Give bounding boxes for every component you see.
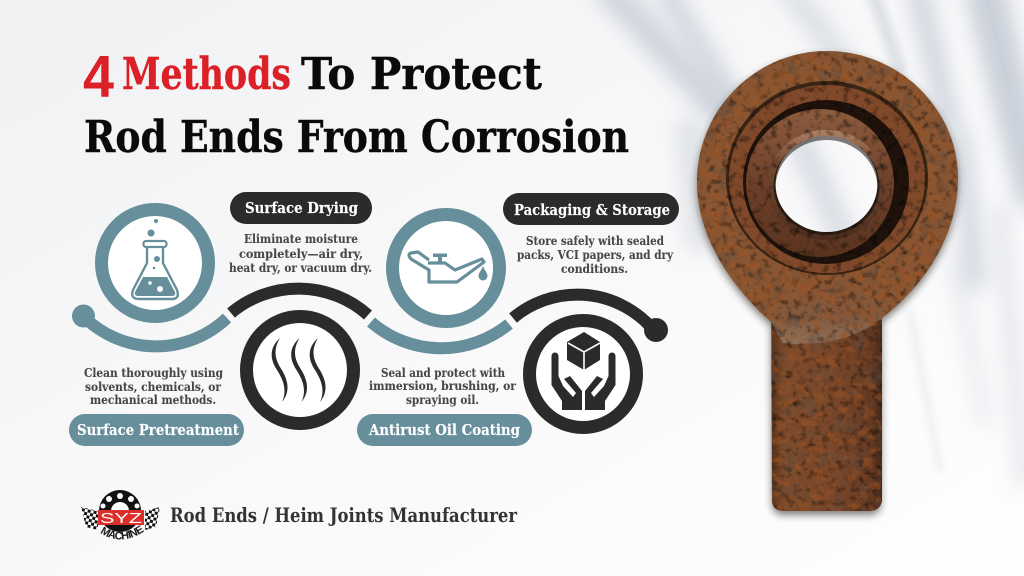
text: Surface Drying description: heat dry, or vacuum dry. — [229, 261, 372, 275]
label: Packaging & Storage — [503, 193, 679, 225]
dark connector arc — [231, 289, 368, 315]
teal connector arc with start dot — [72, 304, 227, 346]
step 4: hands and box ring icon — [530, 320, 636, 428]
step 2: steam ring icon — [246, 316, 354, 424]
label: Surface Drying — [230, 192, 372, 224]
dark connector arc with end dot — [513, 295, 668, 342]
text: Surface Drying description: Eliminate moisture — [244, 232, 358, 246]
step 3: oil can ring icon — [392, 214, 500, 322]
text: Packaging & Storage description: conditions. — [561, 262, 628, 276]
text: Antirust Oil Coating description — [369, 366, 517, 407]
title: To Protect — [301, 49, 542, 100]
title — [83, 44, 629, 163]
text: Surface Drying description — [229, 232, 372, 275]
teal connector arc 2 — [371, 322, 509, 348]
title: Methods — [122, 49, 291, 100]
text: Antirust Oil Coating description: immersion, brushing, or — [369, 379, 517, 393]
footer tagline: Rod Ends / Heim Joints Manufacturer — [170, 504, 518, 527]
label: Surface Drying: Surface Drying — [245, 199, 358, 217]
logo: SYZ Machine: SYZ — [100, 510, 142, 527]
title: 4 — [83, 44, 114, 110]
text: Packaging & Storage description: packs, VCI papers, and dry — [517, 248, 674, 262]
text: Packaging & Storage description — [517, 234, 674, 276]
text: Packaging & Storage description: Store safely with sealed — [526, 234, 665, 248]
text: Surface Pretreatment description: mechanical methods. — [90, 393, 216, 407]
text: Antirust Oil Coating description: spraying oil. — [406, 393, 479, 407]
title: Rod Ends From Corrosion — [84, 112, 629, 163]
logo: SYZ Machine: MACHINE — [100, 525, 144, 540]
label: Surface Pretreatment — [69, 414, 244, 446]
label: Antirust Oil Coating: Antirust Oil Coating — [368, 421, 520, 439]
photo: rusty rod end — [697, 51, 958, 515]
step 1: flask ring icon — [102, 210, 208, 316]
label: Surface Pretreatment: Surface Pretreatment — [77, 421, 239, 439]
label: Antirust Oil Coating — [357, 414, 532, 446]
label: Packaging & Storage: Packaging & Storage — [514, 201, 670, 219]
text: Surface Drying description: completely—air dry, — [239, 247, 363, 261]
text: Surface Pretreatment description: Clean thoroughly using — [84, 366, 224, 380]
logo: SYZ Machine — [81, 490, 160, 540]
text: Antirust Oil Coating description: Seal and protect with — [381, 366, 505, 380]
text: Surface Pretreatment description: solvents, chemicals, or — [85, 380, 222, 394]
text: Surface Pretreatment description — [84, 366, 224, 407]
